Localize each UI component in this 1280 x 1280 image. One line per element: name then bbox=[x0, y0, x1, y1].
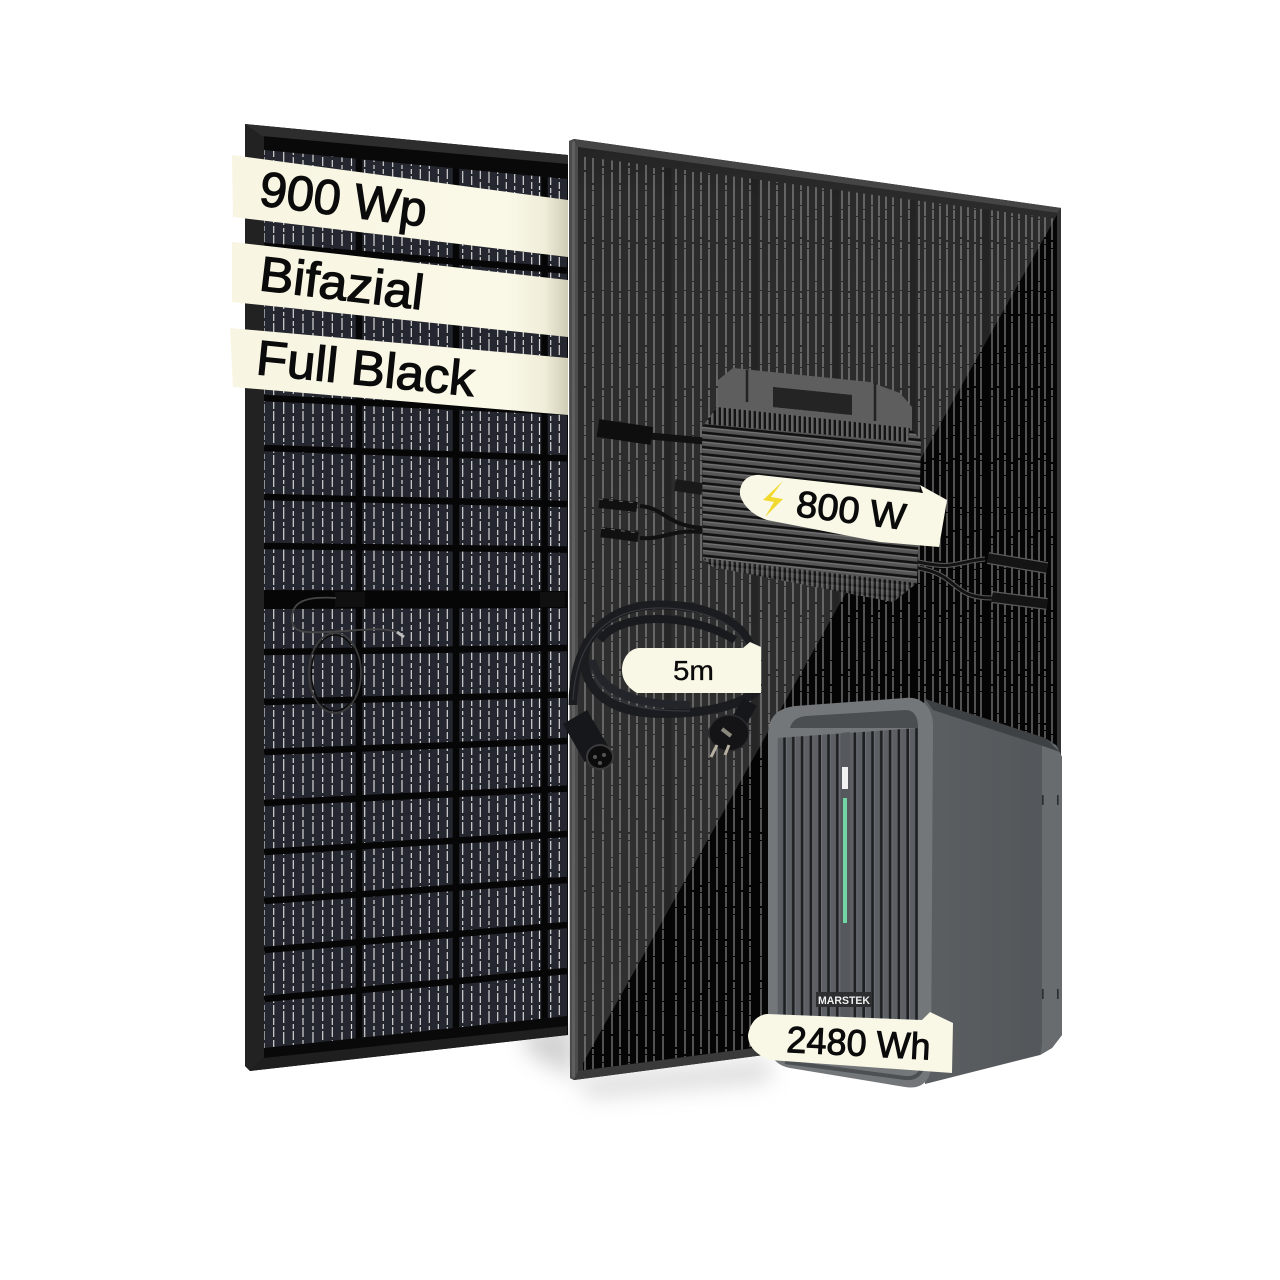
label: Bifazial: Bifazial bbox=[257, 247, 427, 320]
back panel cell grid bbox=[264, 150, 567, 1048]
micro inverter bbox=[598, 368, 1047, 604]
inverter handle opening bbox=[773, 387, 852, 415]
label: 2480 Wh: 2480 Wh bbox=[786, 1019, 932, 1068]
label: 2480 Wh bbox=[748, 1012, 953, 1073]
inverter body bbox=[702, 407, 921, 602]
label: Full Black: Full Black bbox=[254, 331, 478, 407]
front solar panel bbox=[569, 100, 1061, 1100]
right schuko plug bbox=[709, 702, 750, 757]
battery storage bbox=[768, 698, 1062, 1088]
front panel glass with reflection bbox=[578, 147, 1058, 1072]
battery side bbox=[925, 699, 1062, 1084]
label: 900 Wp: 900 Wp bbox=[257, 162, 430, 238]
label: 800 W bbox=[740, 475, 947, 547]
left cable connector bbox=[575, 717, 613, 769]
back panel frame bbox=[245, 124, 568, 1071]
label: 5m bbox=[622, 642, 761, 693]
label: 900 Wp bbox=[232, 155, 568, 257]
inverter right connectors bbox=[918, 558, 1047, 604]
power cable coil with plugs bbox=[573, 605, 758, 769]
battery ribbed front bbox=[777, 728, 918, 1024]
back panel junction boxes and cable bbox=[292, 592, 565, 713]
front panel frame bbox=[569, 139, 1061, 1080]
front panel cell lines bbox=[585, 100, 1052, 1100]
battery base recess bbox=[785, 1062, 922, 1078]
label: Full Black bbox=[230, 328, 568, 415]
back solar panel bbox=[245, 100, 568, 1100]
inverter left connectors bbox=[598, 428, 704, 538]
battery logo: MARSTEK bbox=[818, 995, 870, 1007]
battery front shell bbox=[768, 698, 933, 1088]
inverter handle plate bbox=[718, 368, 912, 430]
icon: lightning bolt bbox=[763, 481, 783, 517]
battery front recess bbox=[790, 710, 918, 728]
battery green charge bar bbox=[843, 798, 847, 923]
soft floor shadow bbox=[520, 1025, 770, 1098]
label: 5m: 5m bbox=[673, 655, 714, 686]
battery status light bbox=[842, 767, 848, 789]
label: 800 W: 800 W bbox=[794, 483, 908, 538]
label: Bifazial bbox=[232, 242, 568, 337]
